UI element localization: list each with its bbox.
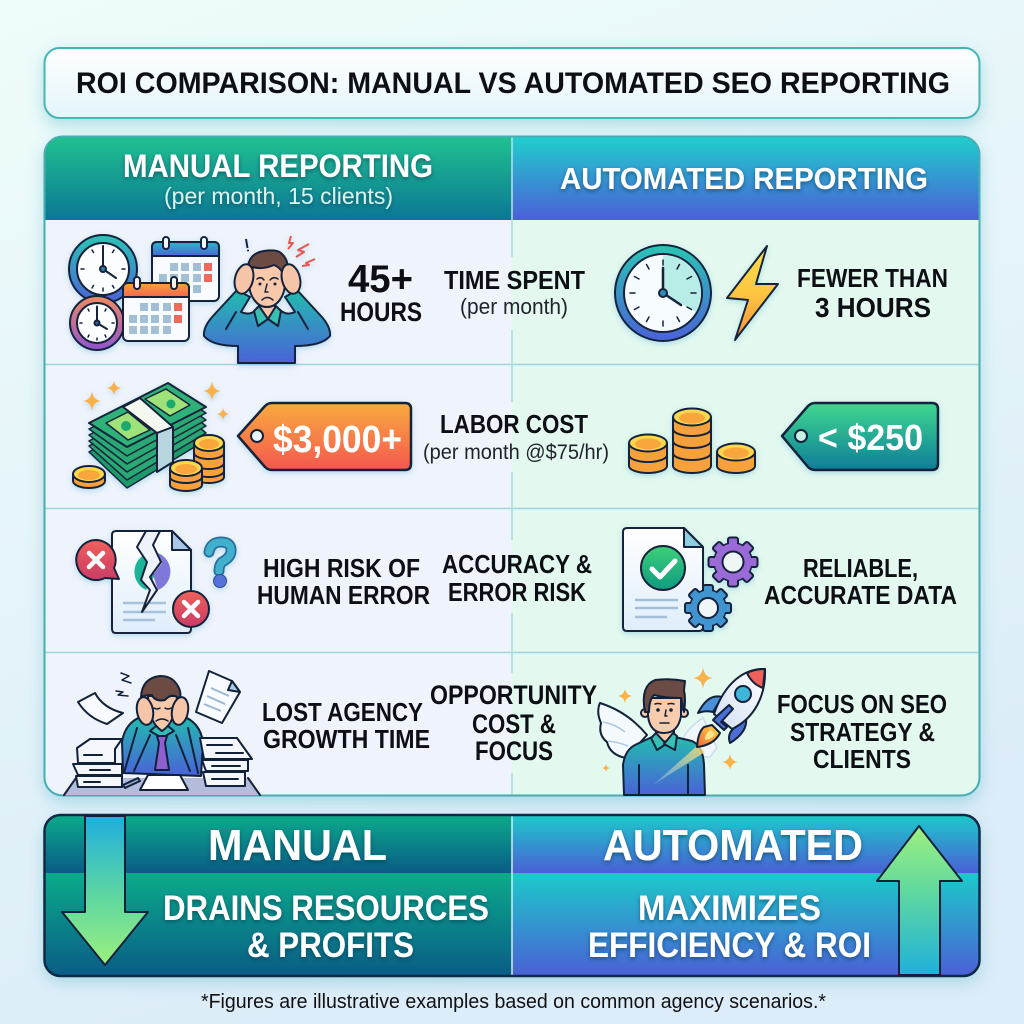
comparison table panel [44, 136, 980, 796]
header: manual reporting: MANUAL REPORTING [123, 148, 433, 184]
icon: note and pen [123, 775, 188, 790]
icon: star sparkles [602, 667, 738, 772]
center label: opportunity cost and focus [430, 680, 597, 766]
icon: error circle right [173, 591, 209, 627]
price tag: $3,000+ [238, 403, 411, 470]
center label: time spent: TIME SPENT [444, 265, 585, 295]
summary text: manual: MANUAL [208, 821, 387, 870]
center label: time spent [444, 265, 585, 319]
icon: flying papers [78, 671, 240, 724]
summary text: automated: AUTOMATED [603, 821, 863, 870]
icon: checked document [623, 528, 703, 631]
center label: accuracy and error risk [442, 549, 592, 607]
header: manual reporting [123, 148, 433, 209]
value: lost agency growth time: GROWTH TIME [263, 724, 430, 754]
icon: purple gear [708, 538, 758, 586]
icon: left paper stack [73, 739, 122, 787]
value: reliable accurate data [764, 553, 957, 610]
center label: labor cost: LABOR COST [440, 409, 588, 439]
icon: front calendar [123, 277, 189, 341]
value: fewer than 3 hours: 3 HOURS [815, 292, 931, 323]
icon: stacked bills [89, 383, 206, 488]
icon: overwhelmed person at desk [63, 671, 260, 795]
summary text: automated: MAXIMIZES [638, 889, 821, 928]
value: focus on seo strategy and clients: CLIENTS [813, 744, 911, 774]
icon: person with head in hands [122, 676, 203, 776]
icon: wings [598, 703, 717, 758]
summary text: automated: EFFICIENCY & ROI [588, 926, 871, 965]
icon: lightning bolt [727, 246, 778, 340]
icon: clocks and calendars [69, 235, 219, 350]
icon: stress sparks [288, 236, 315, 266]
price tag: under $250: < $250 [818, 417, 923, 458]
summary text: manual: & PROFITS [247, 926, 414, 965]
icon: coin stacks [629, 408, 755, 473]
icon: right paper stack [200, 738, 252, 786]
value: high risk of human error: HUMAN ERROR [257, 580, 430, 610]
summary banner [44, 815, 980, 976]
price tag: under $250 [782, 403, 938, 470]
icon: short coin stack [170, 460, 202, 491]
icon: tall coin stack [194, 435, 224, 483]
value: reliable accurate data: ACCURATE DATA [764, 580, 957, 610]
center label: accuracy and error risk: ERROR RISK [448, 577, 586, 607]
value: lost agency growth time [262, 697, 430, 754]
value: lost agency growth time: LOST AGENCY [262, 697, 423, 727]
icon: back calendar [152, 237, 219, 301]
center label: labor cost [423, 409, 609, 464]
icon: coin [73, 466, 105, 488]
icon: rocket [653, 669, 765, 785]
icon: automated clock [615, 245, 711, 341]
icon: desk [63, 778, 260, 795]
icon: blue gear [685, 585, 731, 631]
price tag: $3,000+: $3,000+ [273, 419, 402, 461]
value: 45+ hours: HOURS [340, 297, 422, 327]
value: fewer than 3 hours [797, 263, 948, 323]
footnote: *Figures are illustrative examples based on common agency scenarios.* [201, 991, 826, 1013]
summary text: manual: DRAINS RESOURCES [163, 889, 489, 928]
value: focus on seo strategy and clients [777, 689, 947, 774]
title box: ROI COMPARISON: MANUAL VS AUTOMATED SEO REPORTING [76, 67, 950, 100]
icon: question mark [209, 542, 231, 588]
value: high risk of human error: HIGH RISK OF [263, 553, 420, 583]
icon: winged person with rocket [598, 667, 765, 795]
center label: opportunity cost and focus: FOCUS [475, 736, 553, 766]
title box [44, 48, 980, 118]
value: 45+ hours [340, 258, 422, 327]
center label: accuracy and error risk: ACCURACY & [442, 549, 592, 579]
icon: torn document [112, 531, 191, 633]
value: 45+ hours: 45+ [348, 258, 413, 301]
center label: opportunity cost and focus: COST & [472, 709, 556, 739]
value: high risk of human error [257, 553, 430, 610]
center label: time spent: (per month) [460, 294, 568, 319]
icon: small clock [70, 296, 124, 350]
center label: labor cost: (per month @$75/hr) [423, 441, 609, 464]
value: focus on seo strategy and clients: FOCUS ON SEO [777, 689, 947, 719]
value: focus on seo strategy and clients: STRATEGY & [790, 717, 935, 747]
icon: person [623, 679, 705, 795]
summary text: manual [163, 821, 489, 965]
icon: sparkles [83, 381, 229, 420]
center label: opportunity cost and focus: OPPORTUNITY [430, 680, 597, 710]
value: reliable accurate data: RELIABLE, [803, 553, 918, 583]
value: fewer than 3 hours: FEWER THAN [797, 263, 948, 293]
arrow: resources going down [62, 816, 148, 965]
icon: broken document with errors [76, 531, 231, 633]
icon: error bubble left [76, 540, 119, 580]
header: automated reporting: AUTOMATED REPORTING [560, 161, 928, 196]
icon: pile of cash and coins [73, 381, 229, 491]
arrow: ROI going up [877, 826, 962, 975]
header: manual reporting: (per month, 15 clients) [164, 183, 393, 209]
summary text: automated [588, 821, 871, 965]
icon: stressed person [204, 236, 330, 363]
icon: large clock [69, 235, 137, 303]
icon: verified document and gears [623, 528, 758, 631]
